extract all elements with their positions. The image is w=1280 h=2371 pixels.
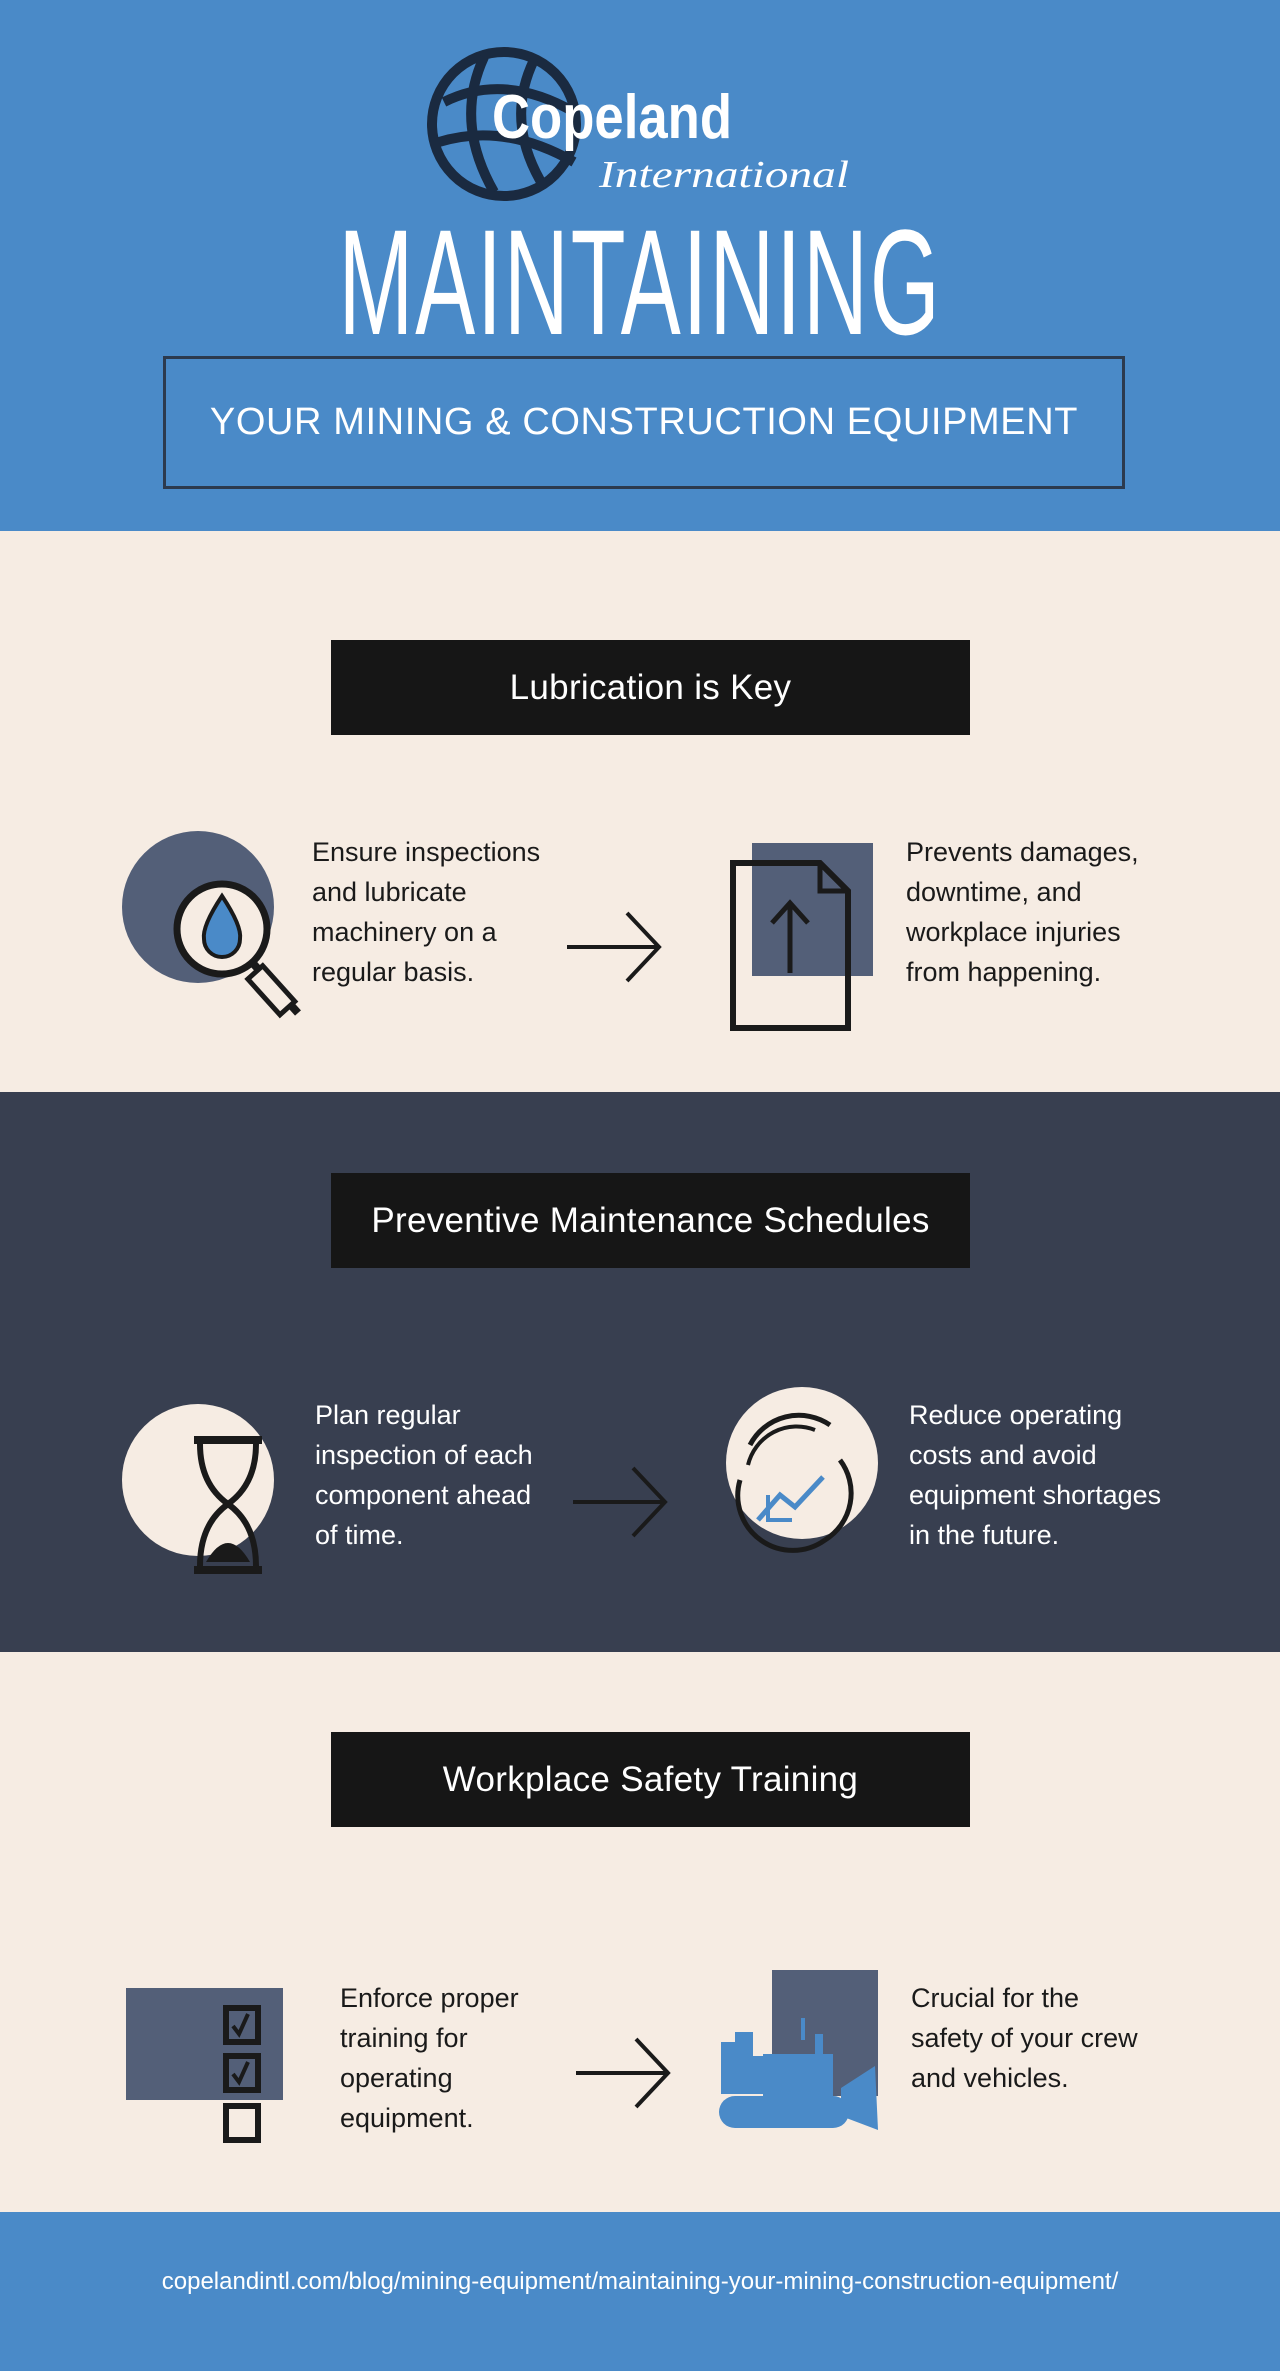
icon: chart cycle: [726, 1387, 878, 1553]
text: prevents: Prevents damages,: [906, 837, 1139, 867]
text: plan: Plan regular: [315, 1400, 461, 1430]
logo: International: [598, 154, 849, 196]
text: prevents: from happening.: [906, 957, 1101, 987]
text: crucial: and vehicles.: [911, 2063, 1069, 2093]
logo: [427, 47, 849, 201]
text: reduce: [909, 1400, 1161, 1550]
url: copelandintl.com/blog/mining-equipment/maintaining-your-mining-construction-equipment/: [162, 2268, 1118, 2295]
heading: [331, 1732, 970, 1827]
text: plan: [315, 1400, 533, 1550]
heading: [331, 1173, 970, 1268]
text: prevents: [906, 837, 1139, 987]
text: ensure: and lubricate: [312, 877, 467, 907]
text: prevents: downtime, and: [906, 877, 1082, 907]
text: ensure: machinery on a: [312, 917, 497, 947]
text: reduce: Reduce operating: [909, 1400, 1122, 1430]
icon: magnifier drop: [122, 831, 301, 1018]
heading: Preventive Maintenance Schedules: [371, 1200, 930, 1240]
arrow: [576, 2038, 671, 2108]
text: enforce: [340, 1983, 519, 2133]
text: enforce: operating: [340, 2063, 453, 2093]
text: plan: inspection of each: [315, 1440, 533, 1470]
heading: [331, 640, 970, 735]
text: reduce: in the future.: [909, 1520, 1059, 1550]
text: ensure: regular basis.: [312, 957, 474, 987]
text: crucial: Crucial for the: [911, 1983, 1079, 2013]
text: enforce: Enforce proper: [340, 1983, 519, 2013]
text: ensure: Ensure inspections: [312, 837, 540, 867]
icon: document: [730, 843, 873, 1031]
text: crucial: safety of your crew: [911, 2023, 1138, 2053]
text: prevents: workplace injuries: [906, 917, 1121, 947]
title: MAINTAINING: [338, 198, 942, 366]
subtitle box: [163, 356, 1125, 489]
panel: lubrication: [0, 531, 1280, 1092]
text: enforce: training for: [340, 2023, 468, 2053]
arrow: [573, 1466, 668, 1538]
icon: bulldozer: [719, 1970, 878, 2130]
header: [0, 0, 1280, 531]
text: crucial: [911, 1983, 1138, 2093]
panel: safety training: [0, 1652, 1280, 2212]
text: plan: component ahead: [315, 1480, 531, 1510]
text: reduce: costs and avoid: [909, 1440, 1097, 1470]
footer: [0, 2212, 1280, 2371]
panel: preventive maintenance: [0, 1092, 1280, 1652]
text: enforce: equipment.: [340, 2103, 474, 2133]
icon: checklist: [126, 1988, 283, 2143]
text: ensure: [312, 837, 540, 987]
icon: hourglass: [122, 1404, 274, 1574]
arrow: [567, 912, 662, 982]
subtitle box: YOUR MINING & CONSTRUCTION EQUIPMENT: [210, 401, 1078, 443]
heading: Workplace Safety Training: [443, 1760, 858, 1798]
text: plan: of time.: [315, 1520, 404, 1550]
text: reduce: equipment shortages: [909, 1480, 1161, 1510]
heading: Lubrication is Key: [510, 668, 791, 706]
logo: Copeland: [492, 83, 732, 152]
